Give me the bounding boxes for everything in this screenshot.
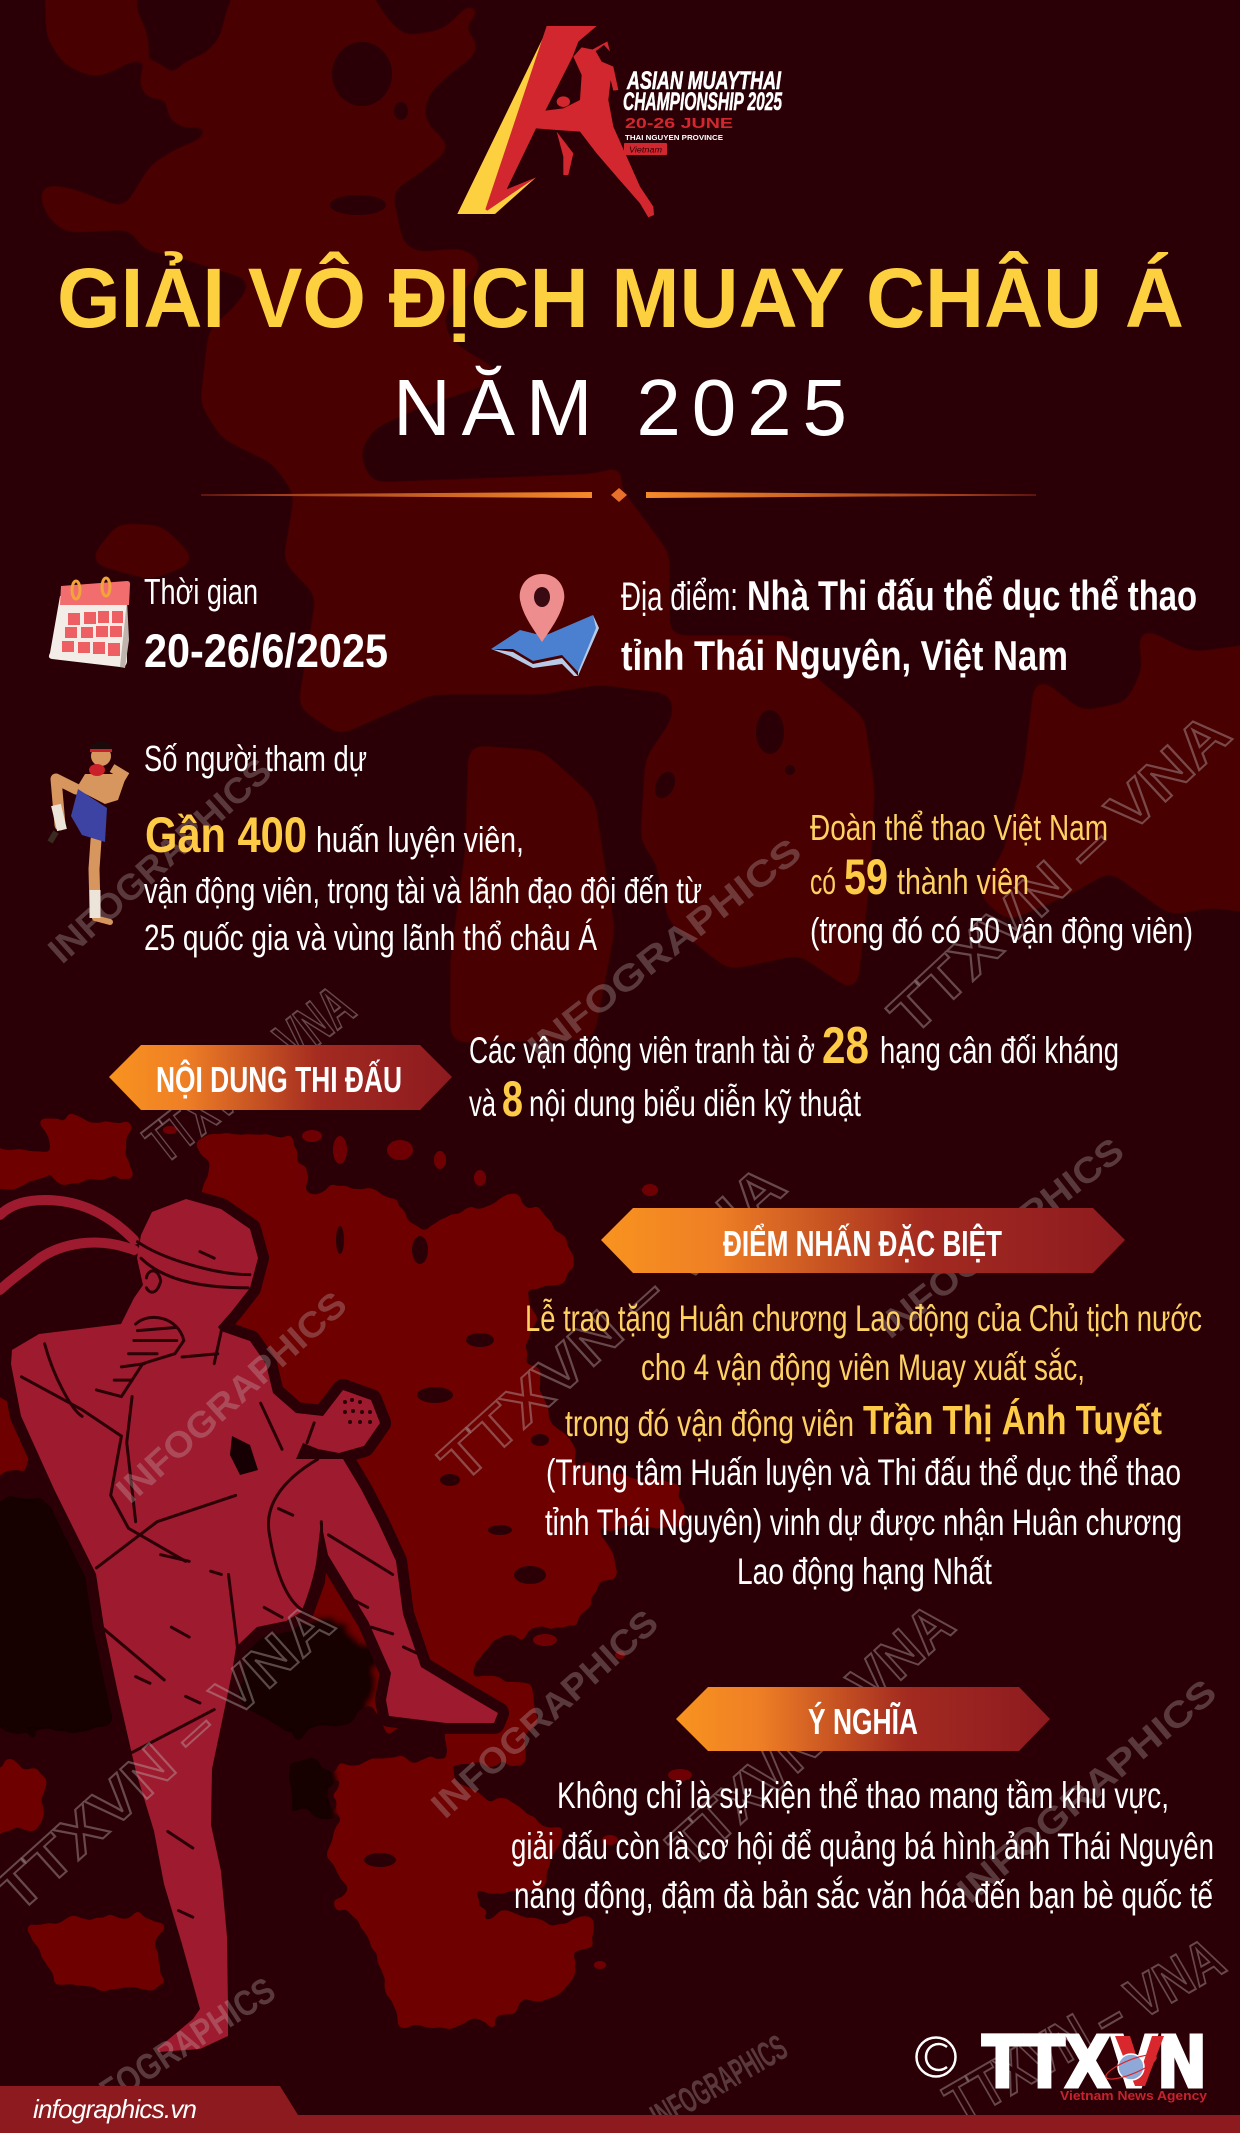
- banner: competition content: [109, 1045, 452, 1110]
- background: red splatter: [0, 1126, 680, 2020]
- text: highlights: cho 4 vận động viên Muay xuất sắc,: [641, 1347, 1085, 1388]
- icon: map pin: [491, 574, 599, 676]
- text: venue: tỉnh Thái Nguyên, Việt Nam: [621, 632, 1068, 679]
- text: participants: 25 quốc gia và vùng lãnh thổ châu Á: [144, 917, 597, 958]
- copyright mark: [916, 2038, 956, 2076]
- text: competition content: nội dung biểu diễn kỹ thuật: [529, 1083, 862, 1124]
- logo: wordmark: CHAMPIONSHIP 2025: [623, 88, 783, 116]
- subtitle: NĂM 2025: [393, 363, 847, 452]
- text: competition content: 8: [502, 1071, 523, 1127]
- logo: wordmark: ASIAN MUAYTHAI: [626, 67, 782, 95]
- text: venue: [621, 572, 1197, 679]
- banner: significance: [676, 1687, 1050, 1751]
- background: map shapes: [43, 0, 1240, 1038]
- icon: calendar: [49, 578, 130, 668]
- text: significance: [511, 1775, 1214, 1916]
- text: vietnam delegation: thành viên: [897, 861, 1029, 902]
- footer: website: infographics.vn: [33, 2094, 197, 2124]
- glove dots: [343, 1398, 372, 1424]
- watermarks: INFOGRAPHICS: [67, 1969, 282, 2129]
- silhouette fill: [11, 1199, 498, 2052]
- heading: venue label: Địa điểm:: [621, 575, 738, 619]
- text: TTXVN – VNA: [427, 1152, 798, 1495]
- watermarks: INFOGRAPHICS: [108, 1283, 355, 1511]
- text: highlights: [525, 1298, 1202, 1592]
- logo: dates: 20-26 JUNE: [625, 115, 733, 132]
- text: vietnam delegation: Đoàn thể thao Việt Nam: [810, 807, 1108, 848]
- text: participants: vận động viên, trọng tài và lãnh đạo đội đến từ: [144, 870, 702, 911]
- background: splatter drops: [163, 1126, 705, 1969]
- banner: competition content: NỘI DUNG THI ĐẤU: [156, 1058, 402, 1100]
- divider: [201, 488, 1036, 502]
- logo: TTXVN: Vietnam News Agency: [1060, 2088, 1208, 2103]
- text: TTXVN – VNA: [877, 700, 1240, 1048]
- watermarks: INFOGRAPHICS: [40, 750, 279, 971]
- illustration: boxer silhouette: [0, 1199, 498, 2052]
- heading: time: Thời gian: [144, 571, 258, 612]
- text: dates: 20-26/6/2025: [144, 624, 388, 677]
- text: highlights: Trần Thị Ánh Tuyết: [863, 1397, 1162, 1443]
- text: competition content: 28: [822, 1017, 869, 1075]
- background: dark specks: [336, 1226, 549, 1867]
- event logo: [457, 26, 783, 217]
- text: competition content: Các vận động viên tranh tài ở: [469, 1030, 815, 1071]
- text: competition content: [469, 1017, 1119, 1127]
- watermarks: INFOGRAPHICS: [520, 830, 809, 1068]
- watermarks: INFOGRAPHICS: [949, 1671, 1224, 1911]
- banner: significance: Ý NGHĨA: [808, 1700, 918, 1742]
- text: vietnam delegation: có: [810, 861, 836, 902]
- icon: muay fighter: [50, 741, 127, 922]
- text: highlights: Lao động hạng Nhất: [737, 1551, 993, 1592]
- logo: country tag: [624, 143, 667, 155]
- dark gap under arm: [230, 1436, 258, 1475]
- logo: wordmark: [623, 67, 783, 116]
- text: vietnam delegation: 59: [844, 849, 888, 905]
- logo: country tag: Vietnam: [629, 144, 662, 154]
- heading: participants: Số người tham dự: [144, 738, 367, 779]
- text: TTXVN – VNA: [133, 973, 366, 1175]
- watermarks: INFOGRAPHICS: [644, 2026, 794, 2133]
- watermarks: INFOGRAPHICS: [423, 1601, 666, 1826]
- watermarks: INFOGRAPHICS: [870, 1129, 1131, 1346]
- banner: highlights: [601, 1208, 1125, 1273]
- body cracks and lines: [21, 1242, 418, 1917]
- text: participants: Gần 400: [145, 807, 307, 863]
- watermarks: [40, 750, 1224, 2133]
- banner: highlights: ĐIỂM NHẤN ĐẶC BIỆT: [723, 1222, 1002, 1264]
- background: map holes: [330, 42, 795, 801]
- text: participants: huấn luyện viên,: [316, 819, 524, 860]
- text: participants: [144, 807, 702, 958]
- footer bar: [0, 2086, 1240, 2133]
- logo: province: THAI NGUYEN PROVINCE: [625, 133, 723, 142]
- text: competition content: và: [469, 1083, 496, 1124]
- text: highlights: trong đó vận động viên: [565, 1403, 854, 1444]
- headband ribbons: [0, 1200, 134, 1290]
- text: vietnam delegation: [810, 807, 1193, 951]
- title: GIẢI VÔ ĐỊCH MUAY CHÂU Á: [57, 251, 1184, 345]
- text: TTXVN – VNA: [655, 1590, 966, 1880]
- silhouette outline: [11, 1199, 498, 2052]
- logo: emblem: [457, 26, 654, 217]
- text: competition content: hạng cân đối kháng: [880, 1030, 1119, 1071]
